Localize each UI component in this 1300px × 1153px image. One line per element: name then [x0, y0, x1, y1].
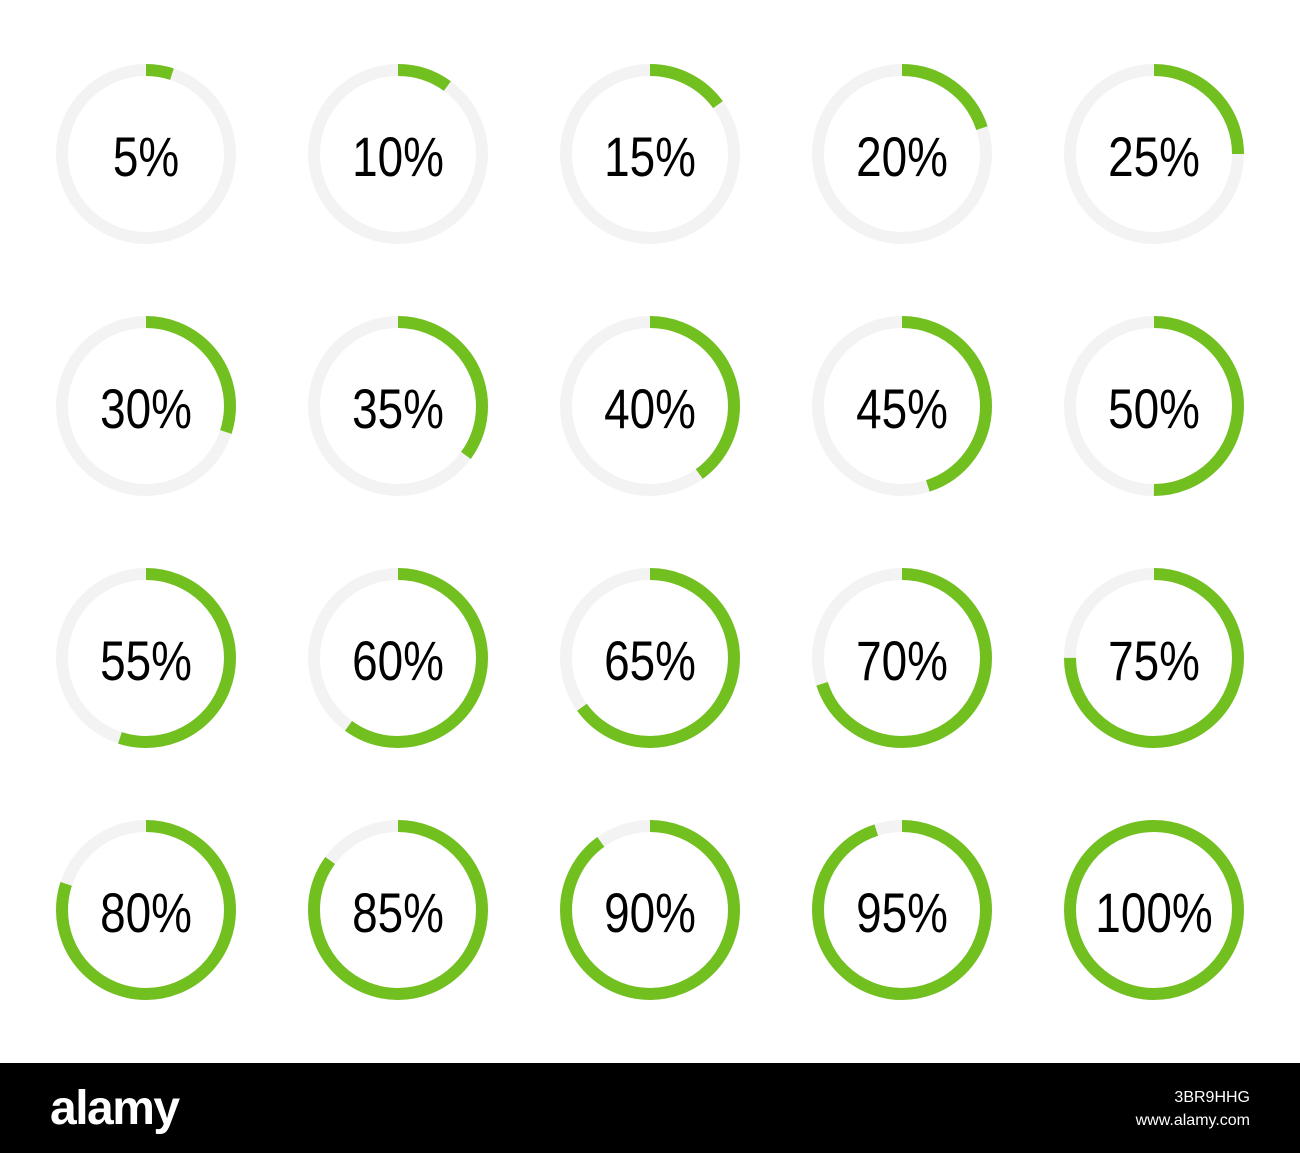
ring 20%: 20%	[856, 126, 948, 188]
logo: alamy: alamy	[50, 1082, 180, 1135]
ring 70%: 70%	[856, 630, 948, 692]
ring 90%: 90%	[604, 882, 696, 944]
ring 55%	[62, 574, 230, 742]
ring 80%	[62, 826, 230, 994]
ring 30%: 30%	[100, 378, 192, 440]
ring 75%	[1070, 574, 1238, 742]
ring 50%	[1070, 322, 1238, 490]
ring 90%	[566, 826, 734, 994]
ring 65%: 65%	[604, 630, 696, 692]
ring 35%: 35%	[352, 378, 444, 440]
ring 5%	[62, 70, 230, 238]
ring 60%: 60%	[352, 630, 444, 692]
ring 65%	[566, 574, 734, 742]
footer: image id and url: 3BR9HHG	[1174, 1089, 1250, 1106]
ring 75%: 75%	[1108, 630, 1200, 692]
footer bar	[0, 1063, 1300, 1153]
ring 95%: 95%	[856, 882, 948, 944]
ring 45%: 45%	[856, 378, 948, 440]
ring 25%: 25%	[1108, 126, 1200, 188]
ring 40%: 40%	[604, 378, 696, 440]
ring 85%: 85%	[352, 882, 444, 944]
ring 35%	[314, 322, 482, 490]
ring 10%: 10%	[352, 126, 444, 188]
ring 45%	[818, 322, 986, 490]
ring 10%	[314, 70, 482, 238]
ring 25%	[1070, 70, 1238, 238]
ring 95%	[818, 826, 986, 994]
ring 70%	[818, 574, 986, 742]
ring 15%: 15%	[604, 126, 696, 188]
ring 30%	[62, 322, 230, 490]
infographic: percentage rings grid: www.alamy.com	[1135, 1112, 1250, 1129]
ring 20%	[818, 70, 986, 238]
ring 50%: 50%	[1108, 378, 1200, 440]
ring 15%	[566, 70, 734, 238]
ring 55%: 55%	[100, 630, 192, 692]
ring 80%: 80%	[100, 882, 192, 944]
ring 85%	[314, 826, 482, 994]
ring 100%	[1070, 826, 1238, 994]
ring 60%	[314, 574, 482, 742]
ring 40%	[566, 322, 734, 490]
ring 100%: 100%	[1095, 882, 1213, 944]
ring 5%: 5%	[113, 126, 179, 188]
